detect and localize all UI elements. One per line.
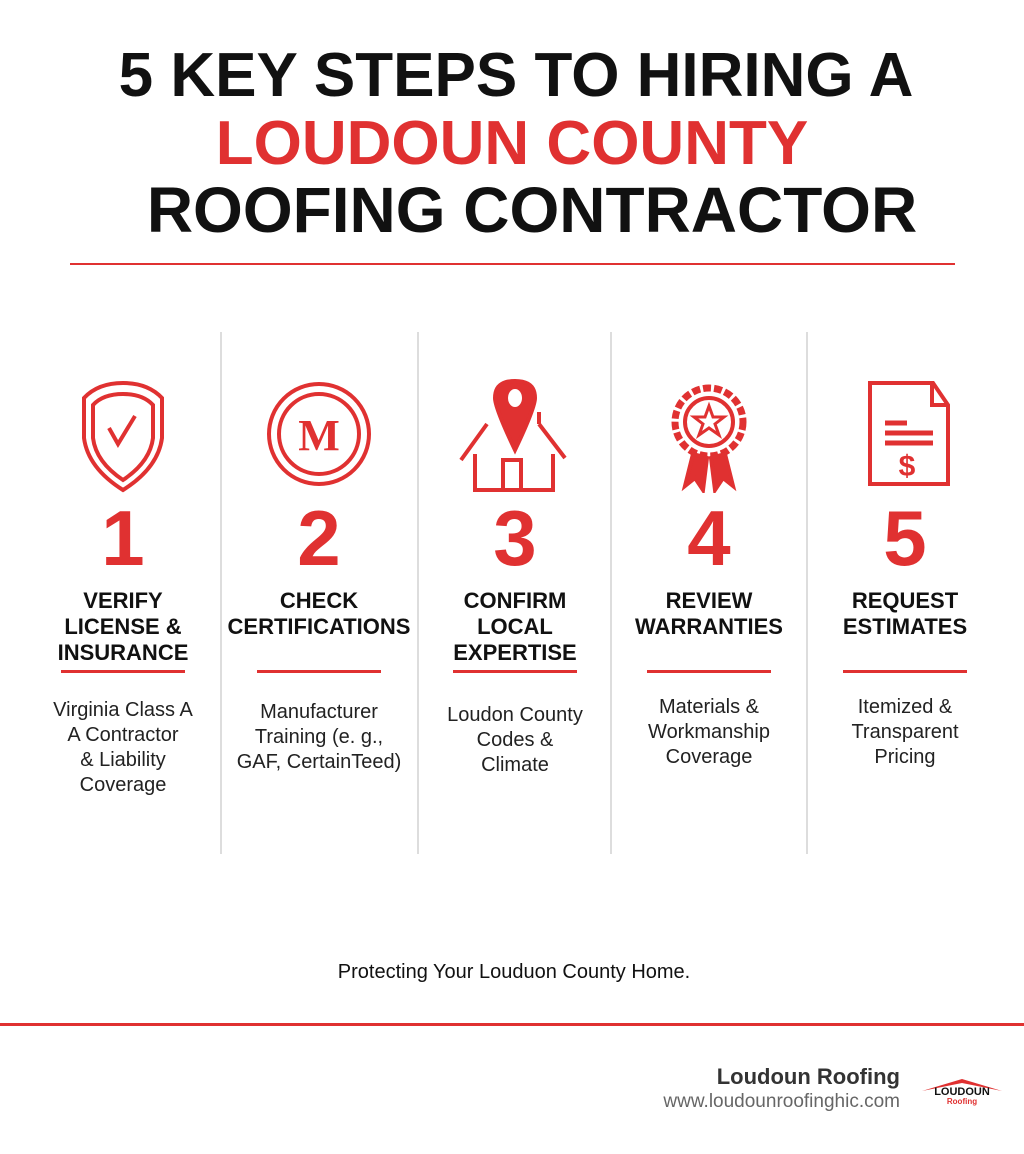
- panel: step 2: CERTIFICATIONS: [228, 614, 410, 639]
- panel: step 2: GAF, CertainTeed): [237, 751, 401, 773]
- panel: step 2: CHECK: [280, 588, 358, 613]
- panel: step 1: LICENSE &: [64, 614, 182, 639]
- panel: step 3: LOCAL: [477, 614, 553, 639]
- panel: step 3: Loudon County: [447, 704, 583, 726]
- footer brand: Loudoun Roofing: [717, 1064, 900, 1089]
- panel: step 4: Materials &: [659, 696, 759, 718]
- panel: step 2: Training (e. g.,: [255, 726, 383, 748]
- title: [119, 41, 917, 246]
- text: 5 KEY STEPS TO HIRING A: [119, 41, 913, 110]
- panel: step 4: [635, 384, 783, 768]
- text: ROOFING CONTRACTOR: [147, 174, 917, 246]
- panel: step 3: EXPERTISE: [453, 640, 577, 665]
- icon: M badge: [267, 382, 371, 486]
- panel: step 1: VERIFY: [83, 588, 163, 613]
- panel: step 5: [843, 381, 967, 768]
- logo: [922, 1079, 1002, 1106]
- panel: step 3: [447, 379, 583, 776]
- panel: step 3: Codes &: [477, 729, 553, 751]
- panel: step 2: Manufacturer: [260, 701, 378, 723]
- logo: LOUDOUN: [934, 1086, 990, 1098]
- panel: step 5: REQUEST: [852, 588, 958, 613]
- icon: award ribbon: [672, 384, 746, 493]
- panel: step 2: 2: [297, 494, 341, 582]
- panel: step 5: Transparent: [851, 721, 959, 743]
- panel: step 4: 4: [687, 494, 731, 582]
- icon: invoice: $: [899, 450, 916, 483]
- panel: step 5: Itemized &: [858, 696, 952, 718]
- panel: step 1: INSURANCE: [58, 640, 188, 665]
- icon: shield: [82, 381, 164, 492]
- icon: invoice: [868, 381, 950, 486]
- panel: step 1: A Contractor: [67, 724, 179, 746]
- tagline: Protecting Your Louduon County Home.: [338, 961, 690, 983]
- panel: step 4: Coverage: [666, 746, 752, 768]
- panel: step 3: 3: [493, 494, 537, 582]
- panel: step 3: CONFIRM: [464, 588, 566, 613]
- footer brand: www.loudounroofinghic.com: [663, 1091, 900, 1112]
- footer brand: [663, 1064, 900, 1112]
- panel: step 5: Pricing: [874, 746, 936, 768]
- icon: house pin: [459, 379, 566, 492]
- panel: step 5: 5: [883, 494, 927, 582]
- panel: step 4: Workmanship: [648, 721, 770, 743]
- panel: step 1: 1: [101, 494, 145, 582]
- panel: step 4: WARRANTIES: [635, 614, 783, 639]
- panel: step 1: [53, 381, 193, 796]
- panel: step 1: Coverage: [80, 774, 166, 796]
- panel: step 4: REVIEW: [666, 588, 752, 613]
- panel: step 1: & Liability: [80, 749, 166, 771]
- logo: Roofing: [947, 1097, 977, 1106]
- text: LOUDOUN COUNTY: [216, 109, 808, 178]
- panel: step 3: Climate: [481, 754, 549, 776]
- panel: step 1: Virginia Class A: [53, 699, 193, 721]
- panel: step 2: [228, 382, 410, 773]
- panel: step 5: ESTIMATES: [843, 614, 967, 639]
- icon: M badge: M: [298, 411, 340, 460]
